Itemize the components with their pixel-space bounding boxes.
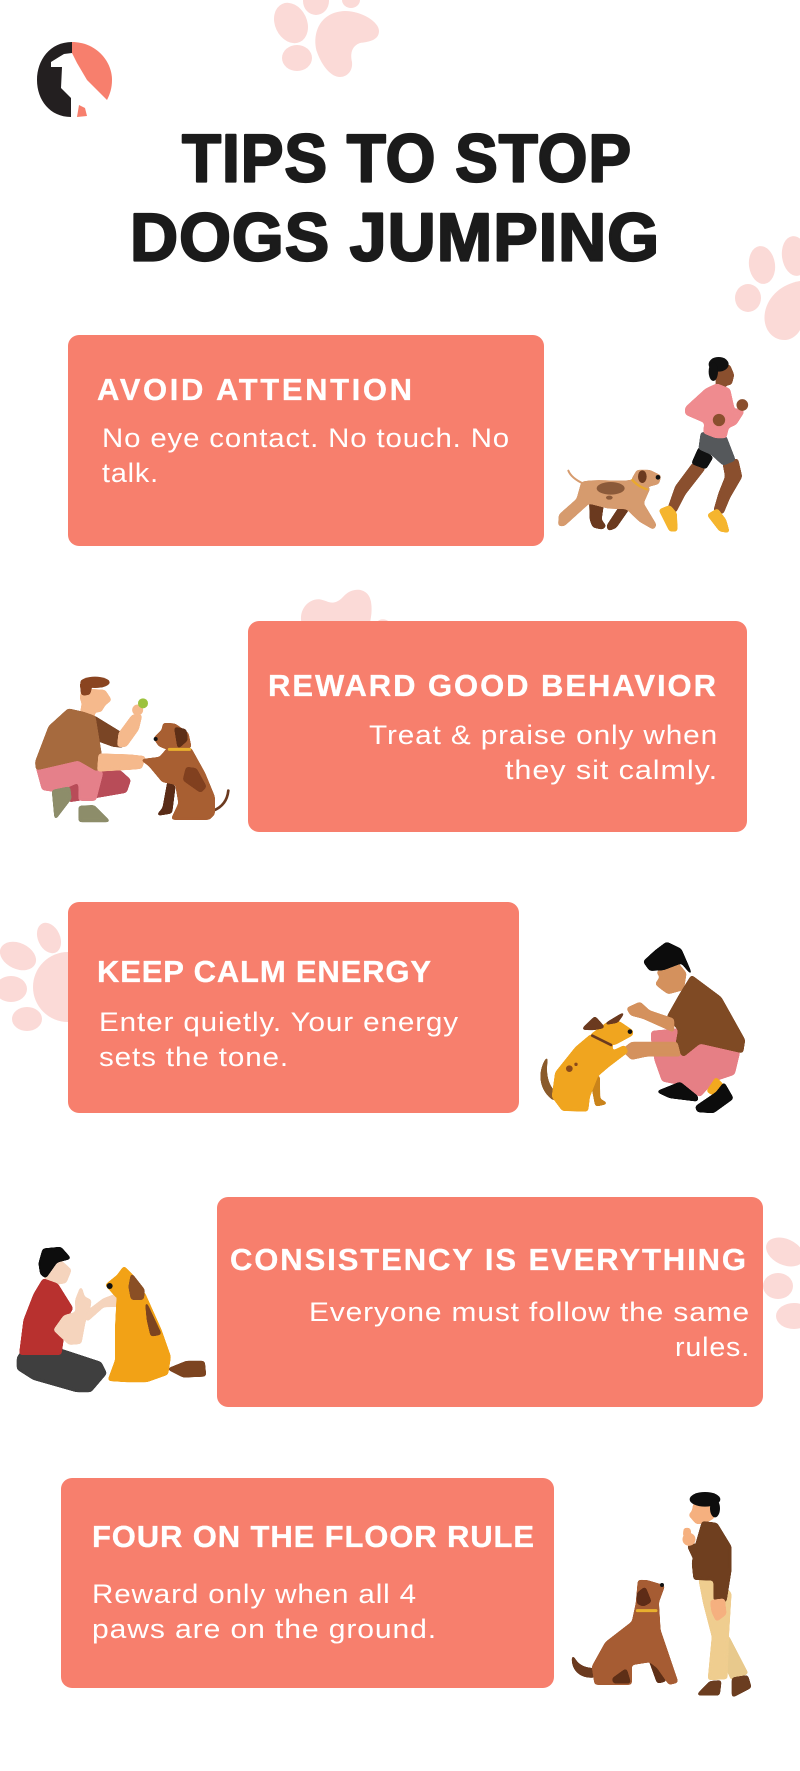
- title: [130, 120, 660, 276]
- brown dog with paw raised: [142, 724, 228, 819]
- kneeling man: [18, 1248, 117, 1391]
- title: TIPS TO STOP: [182, 120, 632, 196]
- text: avoid attention: talk.: [102, 458, 159, 488]
- crouching man: [622, 943, 744, 1112]
- panel: keep calm energy: [68, 902, 519, 1113]
- title: DOGS JUMPING: [130, 200, 660, 276]
- decorative paw: upper right: [735, 234, 800, 340]
- decorative paw: left of calm card: [0, 919, 103, 1031]
- illustration: kneeling man with golden dog: [18, 1248, 205, 1391]
- illustration: man jogging with tan dog: [559, 357, 747, 532]
- yellow dog: [541, 1013, 632, 1111]
- decorative paw: right of consistency card: [761, 1232, 800, 1329]
- panel: four on the floor rule: [61, 1478, 554, 1688]
- text: consistency is everything: [309, 1297, 750, 1362]
- text: reward good behavior: Treat & praise only when: [369, 720, 718, 750]
- text: consistency is everything: rules.: [675, 1332, 750, 1362]
- heading: avoid attention: AVOID ATTENTION: [97, 372, 412, 407]
- illustration: man giving ball to brown dog: [36, 677, 228, 821]
- text: reward good behavior: they sit calmly.: [505, 755, 718, 785]
- text: keep calm energy: Enter quietly. Your energy: [99, 1007, 459, 1037]
- text: avoid attention: [102, 423, 510, 488]
- text: reward good behavior: [369, 720, 718, 785]
- text: keep calm energy: [99, 1007, 459, 1072]
- illustration: standing man with brown dog: [573, 1492, 751, 1697]
- panel: avoid attention: [68, 335, 544, 546]
- panel: consistency is everything: [217, 1197, 763, 1407]
- decorative paw: top: [268, 0, 379, 77]
- text: consistency is everything: Everyone must follow the same: [309, 1297, 750, 1327]
- text: keep calm energy: sets the tone.: [99, 1042, 289, 1072]
- logo: [37, 42, 112, 117]
- tan dog: [559, 470, 660, 530]
- text: four on the floor rule: paws are on the ground.: [92, 1614, 437, 1644]
- heading: keep calm energy: KEEP CALM ENERGY: [97, 954, 431, 989]
- text: four on the floor rule: Reward only when all 4: [92, 1579, 417, 1609]
- jogging man: [660, 357, 747, 532]
- heading: reward good behavior: REWARD GOOD BEHAVIOR: [268, 668, 716, 703]
- heading: consistency is everything: CONSISTENCY IS EVERYTHING: [230, 1242, 746, 1277]
- seated brown dog: [573, 1581, 677, 1684]
- decorative paw: behind reward card: [301, 590, 391, 623]
- illustration: man training yellow dog: [541, 943, 744, 1112]
- standing man: [683, 1492, 751, 1697]
- text: avoid attention: No eye contact. No touch. No: [102, 423, 510, 453]
- golden dog: [106, 1267, 205, 1381]
- crouching man: [36, 677, 148, 821]
- text: four on the floor rule: [92, 1579, 437, 1644]
- heading: four on the floor rule: FOUR ON THE FLOOR RULE: [92, 1519, 534, 1554]
- panel: reward good behavior: [248, 621, 747, 832]
